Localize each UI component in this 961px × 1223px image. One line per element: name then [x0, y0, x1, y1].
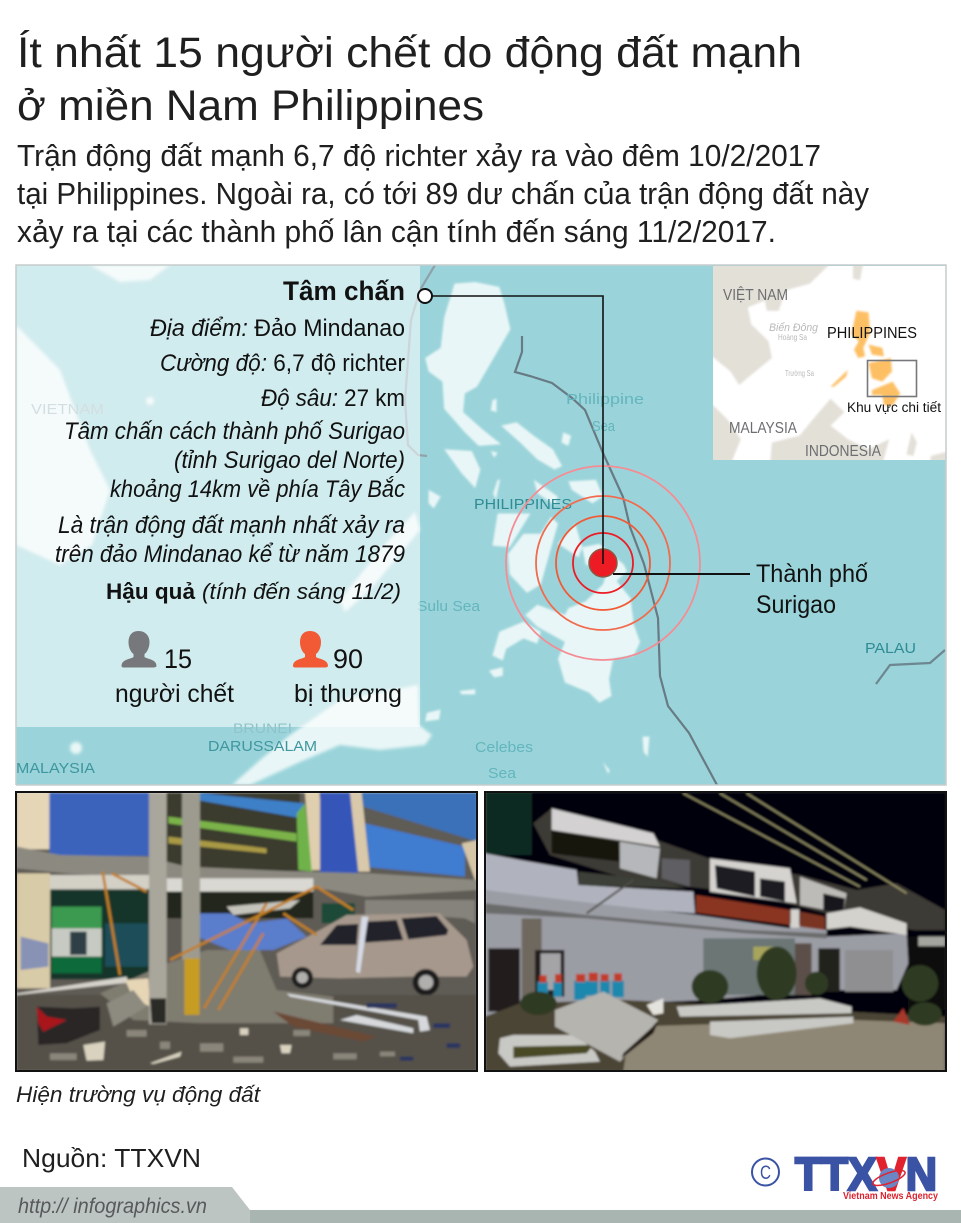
map labels: Sea: [488, 765, 517, 782]
title: ở miền Nam Philippines: [17, 82, 484, 130]
stat: injured: bị thương: [294, 680, 402, 708]
stat: deaths: [115, 631, 234, 708]
inset black labels: PHILIPPINES: [827, 325, 917, 342]
label: Brunei: BRUNEI: [233, 720, 292, 736]
agency name: Vietnam News Agency: [843, 1191, 938, 1202]
fact: strongest since 1879: trên đảo Mindanao kể từ năm 1879: [55, 541, 405, 568]
inset labels: MALAYSIA: [729, 420, 797, 437]
map labels: Sea: [592, 418, 616, 435]
heading: consequences: Hậu quả: [106, 579, 196, 604]
logo: TTXVN: [752, 1148, 938, 1202]
inset labels: Trường Sa: [785, 369, 814, 378]
epicentre dot: [589, 549, 617, 577]
wordmark: TTXVN: [795, 1148, 937, 1200]
land masses: [425, 282, 649, 774]
intro text: xảy ra tại các thành phố lân cận tính đến sáng 11/2/2017.: [17, 214, 776, 249]
trench lines: [405, 265, 945, 785]
fact: distance: [64, 418, 405, 503]
leader marker: [418, 289, 432, 303]
map labels: VIETNAM: [31, 401, 104, 418]
info panel background: [16, 265, 420, 727]
leader line: epicentre: [432, 296, 603, 564]
title: Ít nhất 15 người chết do động đất mạnh: [17, 29, 802, 77]
inset labels: VIỆT NAM: [723, 285, 788, 304]
map frame: [16, 265, 946, 785]
copyright mark: C: [760, 1163, 771, 1184]
map labels: PHILIPPINES: [474, 496, 572, 513]
map labels: DARUSSALAM: [208, 738, 317, 755]
fact: depth: Độ sâu: 27 km: [261, 385, 405, 412]
map labels: Philippine: [566, 391, 644, 408]
fact: strongest since 1879: [55, 512, 405, 568]
icon: grey person: [122, 631, 156, 668]
map labels: PALAU: [865, 640, 916, 657]
concentric shock rings: [506, 466, 700, 660]
inset land: [710, 263, 950, 464]
inset labels: INDONESIA: [805, 443, 881, 460]
source: Nguồn: TTXVN: [22, 1143, 201, 1173]
intro text: [17, 138, 869, 249]
inset black labels: Khu vực chi tiết: [847, 400, 941, 415]
caption: Hiện trường vụ động đất: [16, 1082, 261, 1107]
fact: location: Địa điểm: Đảo Mindanao: [150, 315, 405, 342]
land west: [16, 265, 432, 785]
intro text: Trận động đất mạnh 6,7 độ richter xảy ra vào đêm 10/2/2017: [17, 138, 821, 173]
stat: deaths: 15: [164, 644, 192, 674]
label: Surigao city: Surigao: [756, 591, 836, 619]
inset labels: Biển Đông: [769, 322, 819, 334]
globe emblem: [871, 1167, 907, 1189]
fact: distance: khoảng 14km về phía Tây Bắc: [110, 476, 405, 503]
fact: magnitude: Cường độ: 6,7 độ richter: [160, 350, 405, 377]
panel: map: [16, 263, 950, 785]
fact: distance: (tỉnh Surigao del Norte): [174, 447, 405, 474]
stat: injured: 90: [333, 644, 363, 674]
footer bar: [0, 1187, 961, 1223]
inset locator map: [710, 263, 950, 464]
heading: consequences: (tính đến sáng 11/2): [202, 579, 401, 604]
map labels: MALAYSIA: [16, 760, 95, 777]
title: [17, 29, 802, 130]
inset black labels: [827, 325, 941, 415]
footer url: http:// infographics.vn: [18, 1195, 207, 1218]
photo: damaged street with car: [16, 792, 477, 1071]
leader line: Surigao: [613, 573, 750, 575]
panel text: epicentre facts: [55, 276, 405, 604]
heading: Tâm chấn: Tâm chấn: [283, 276, 405, 306]
icon: orange person: [293, 631, 328, 668]
intro text: tại Philippines. Ngoài ra, có tới 89 dư chấn của trận động đất này: [17, 176, 869, 211]
inset labels: Hoàng Sa: [778, 333, 807, 342]
photo: damaged building at night: [485, 792, 947, 1072]
label: Surigao city: [756, 560, 868, 619]
inset labels: [723, 285, 881, 460]
heading: consequences: [106, 579, 401, 604]
map labels: Celebes: [475, 739, 533, 756]
inset detail box: [868, 360, 916, 396]
inset Philippines: [831, 311, 900, 405]
stat: injured: [293, 631, 402, 708]
map labels: [16, 391, 916, 782]
stat: deaths: người chết: [115, 680, 234, 708]
label: Surigao city: Thành phố: [756, 560, 868, 588]
copyright mark: [752, 1158, 779, 1186]
fact: strongest since 1879: Là trận động đất mạnh nhất xảy ra: [58, 512, 405, 539]
fact: distance: Tâm chấn cách thành phố Surigao: [64, 418, 405, 445]
map labels: Sulu Sea: [417, 598, 481, 615]
